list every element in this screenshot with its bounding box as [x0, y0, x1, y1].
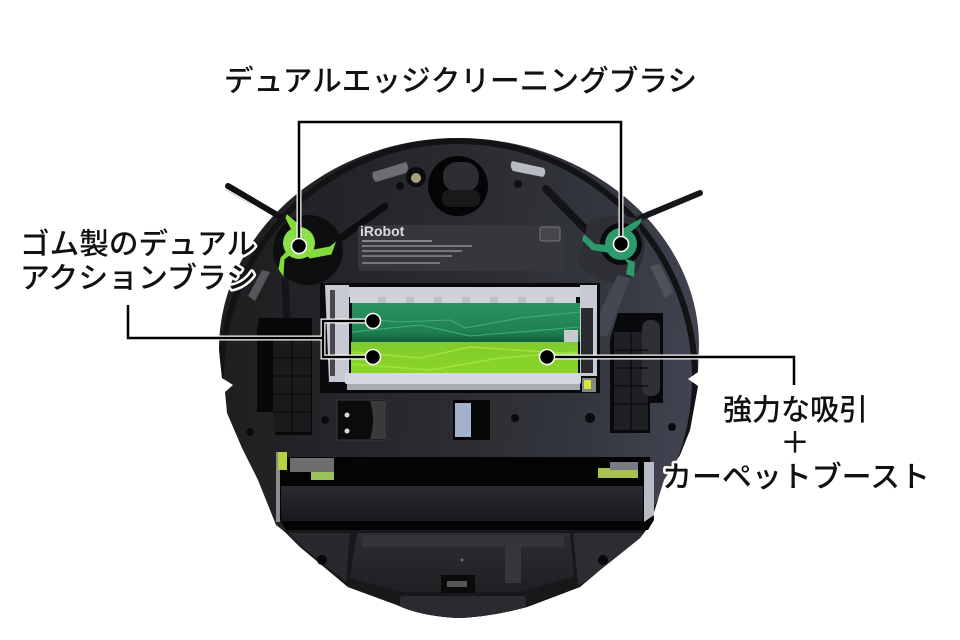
caster wheel — [428, 156, 488, 216]
right side brush — [578, 216, 645, 336]
contact socket — [337, 400, 387, 440]
side bristles left — [226, 186, 385, 240]
label: strong suction plus carpet boost: 強力な吸引 — [723, 394, 868, 427]
left drive wheel — [257, 318, 312, 435]
robot vacuum underside — [215, 136, 705, 622]
label: strong suction plus carpet boost: カーペットブースト — [662, 461, 930, 494]
roller frame — [320, 283, 600, 393]
right drive wheel — [610, 313, 663, 433]
label plate: iRobot — [360, 223, 405, 239]
dock sensor right — [650, 264, 673, 298]
sensor right — [511, 161, 545, 188]
left side brush — [273, 215, 343, 345]
sensor left — [372, 162, 426, 190]
screws — [246, 413, 676, 436]
side bristles right — [546, 189, 700, 236]
bottom cover — [317, 533, 608, 593]
label: rubber dual action brush: アクションブラシ — [20, 262, 256, 295]
callout line: suction — [540, 350, 794, 385]
dust bin — [276, 452, 654, 530]
label: rubber dual action brush — [20, 228, 256, 295]
heading: dual edge brush: デュアルエッジクリーニングブラシ — [224, 65, 697, 98]
label plate — [358, 223, 565, 271]
label: strong suction plus carpet boost — [662, 394, 930, 494]
dock sensor left — [248, 270, 270, 301]
label: rubber dual action brush: ゴム製のデュアル — [20, 228, 256, 261]
robot body — [215, 136, 705, 622]
centre socket — [453, 400, 490, 440]
callout lines: edge brushes — [292, 122, 628, 254]
label: strong suction plus carpet boost: ＋ — [780, 427, 810, 460]
callout lines: rubber brushes — [128, 305, 380, 364]
